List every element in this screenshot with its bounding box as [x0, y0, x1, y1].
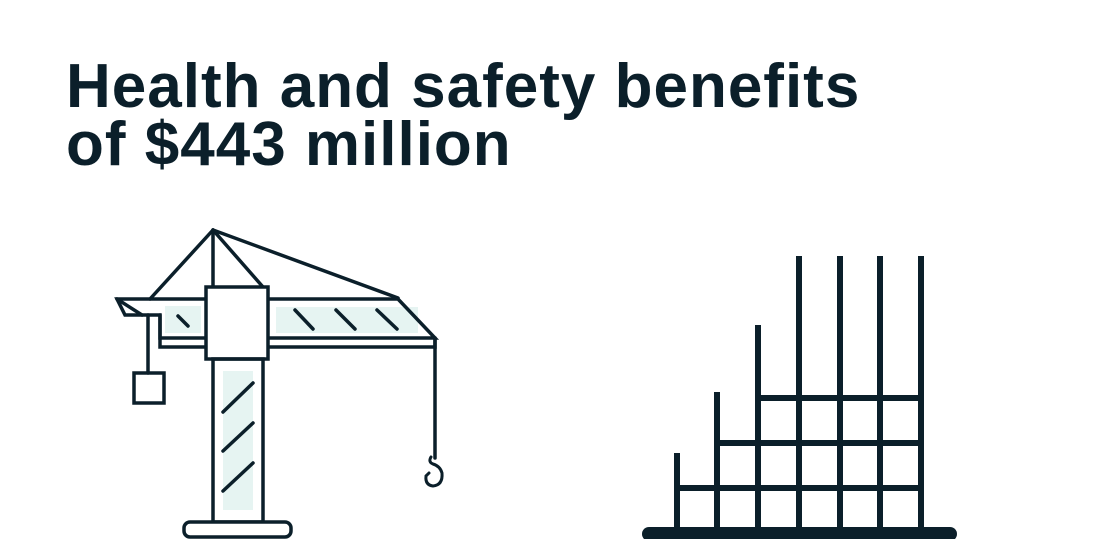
title: Health and safety benefits — [66, 52, 860, 121]
icon: tower crane — [117, 230, 442, 537]
icon: scaffolding — [642, 256, 957, 539]
title: of $443 million — [66, 110, 512, 179]
title — [66, 52, 860, 179]
